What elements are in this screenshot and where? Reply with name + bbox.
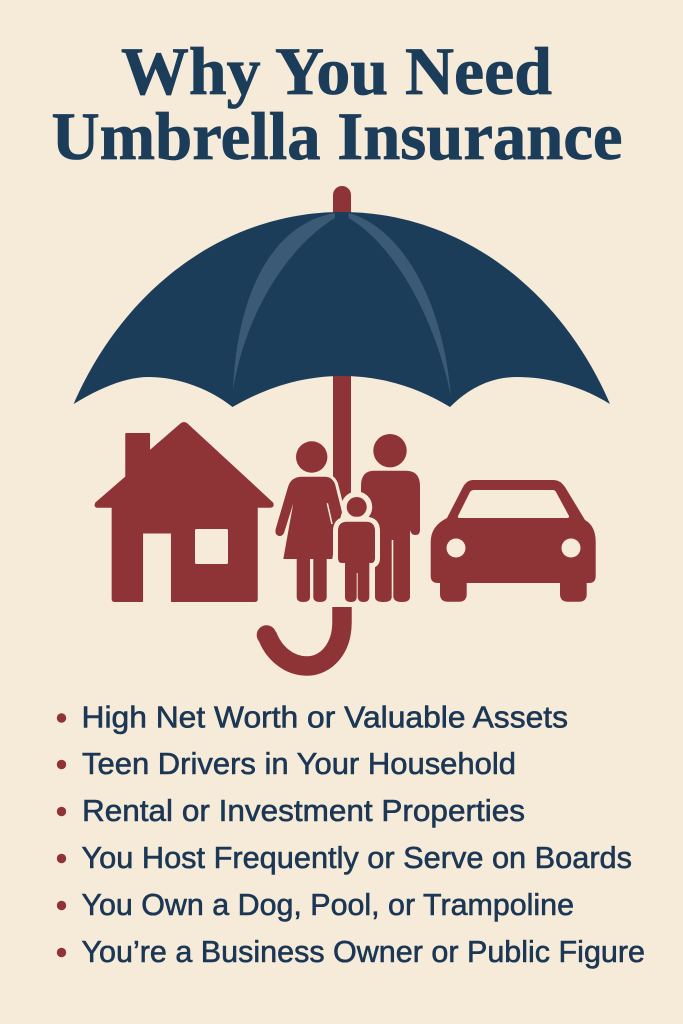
bullet list (57, 700, 645, 969)
umbrella hook handle (257, 607, 342, 666)
icon: house (95, 423, 273, 601)
umbrella shaft (333, 370, 351, 505)
woman arm gap (327, 503, 332, 524)
icon: car (431, 480, 596, 602)
car headlights (446, 538, 580, 558)
car windshield (458, 490, 569, 518)
title: Umbrella Insurance (52, 98, 622, 174)
bullet: rental properties: Rental or Investment Properties (82, 794, 525, 828)
umbrella illustration (74, 186, 610, 666)
canopy right rib (349, 213, 451, 397)
bullet: dog pool trampoline: You Own a Dog, Pool, or Trampoline (82, 888, 574, 922)
umbrella canopy (74, 212, 610, 407)
man figure (361, 434, 420, 602)
bullet: host or boards: You Host Frequently or Serve on Boards (82, 841, 632, 875)
child figure (338, 497, 375, 602)
bullet: business owner: You’re a Business Owner or Public Figure (82, 935, 645, 969)
house window (195, 529, 228, 564)
title: Why You Need (121, 33, 552, 109)
bullet: teen drivers: Teen Drivers in Your Household (82, 747, 516, 781)
title (52, 33, 622, 174)
canopy left rib (233, 213, 335, 390)
umbrella ferrule tip (333, 186, 351, 214)
icon: family (275, 434, 420, 602)
bullet: high net worth: High Net Worth or Valuable Assets (82, 700, 568, 734)
woman figure (275, 441, 342, 602)
